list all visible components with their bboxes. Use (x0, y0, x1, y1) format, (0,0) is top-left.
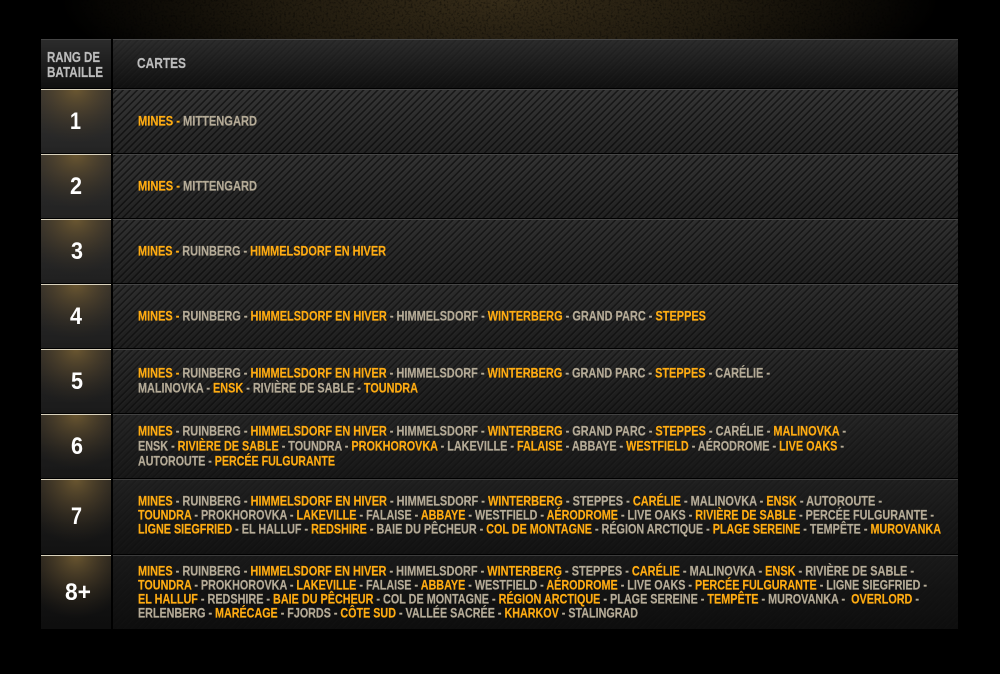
row: rang 5 (41, 349, 958, 413)
maps cell 5: MINES - RUINBERG - HIMMELSDORF EN HIVER - HIMMELSDORF - WINTERBERG - GRAND PARC - STEPPES - CARÉLIE - (138, 365, 770, 382)
header cell: rang de bataille (41, 39, 111, 88)
maps cell 8+: ERLENBERG - MARÉCAGE - FJORDS - CÔTE SUD - VALLÉE SACRÉE - KHARKOV - STALINGRAD (138, 604, 638, 622)
header cell: cartes: CARTES (137, 56, 186, 72)
rank cell 7: 7 (71, 503, 82, 530)
row: rang 3 (41, 219, 958, 283)
row: rang 6 (41, 414, 958, 478)
maps cell 4: MINES - RUINBERG - HIMMELSDORF EN HIVER - HIMMELSDORF - WINTERBERG - GRAND PARC - STEPPES (138, 309, 706, 325)
rank cell 2 (41, 154, 111, 218)
rank cell 7 (41, 479, 111, 554)
maps cell 8+ (113, 555, 958, 629)
rank cell 6 (41, 414, 111, 478)
table header (41, 39, 958, 88)
maps cell 6 (113, 414, 958, 478)
maps cell 7 (113, 479, 958, 554)
maps cell 2 (113, 154, 958, 218)
maps cell 8+: TOUNDRA - PROKHOROVKA - LAKEVILLE - FALAISE - ABBAYE - WESTFIELD - AÉRODROME - LIVE OAKS - PERCÉE FULGURANTE - LIGNE SIEGFRIED - (138, 577, 927, 594)
rank cell 1: 1 (70, 108, 81, 135)
maps cell 7: LIGNE SIEGFRIED - EL HALLUF - REDSHIRE - BAIE DU PÊCHEUR - COL DE MONTAGNE - RÉGION ARCTIQUE - PLAGE SEREINE - TEMPÊTE - MUROVANKA (138, 520, 941, 538)
rank cell 5 (41, 349, 111, 413)
header cell: rang de bataille: BATAILLE (47, 65, 103, 81)
rank cell 5: 5 (71, 368, 83, 395)
maps cell 7: MINES - RUINBERG - HIMMELSDORF EN HIVER - HIMMELSDORF - WINTERBERG - STEPPES - CARÉLIE - MALINOVKA - ENSK - AUTOROUTE - (138, 493, 882, 510)
maps cell 3 (113, 219, 958, 283)
maps cell 6: MINES - RUINBERG - HIMMELSDORF EN HIVER - HIMMELSDORF - WINTERBERG - GRAND PARC - STEPPES - CARÉLIE - MALINOVKA - (138, 423, 846, 440)
maps cell 3: MINES - RUINBERG - HIMMELSDORF EN HIVER (138, 244, 386, 260)
rank cell 2: 2 (70, 173, 82, 200)
rank cell 8+: 8+ (65, 579, 91, 606)
rank cell 3: 3 (71, 238, 83, 265)
row: rang 8+ (41, 555, 958, 629)
row: rang 7 (41, 479, 958, 554)
rank cell 6: 6 (71, 433, 83, 460)
rank cell 1 (41, 89, 111, 153)
rank cell 4 (41, 284, 111, 348)
header cell: rang de bataille: RANG DE (47, 50, 100, 66)
row: rang 2 (41, 154, 958, 218)
rank cell 4: 4 (70, 303, 82, 330)
rank cell 8+ (41, 555, 111, 629)
maps cell 8+: MINES - RUINBERG - HIMMELSDORF EN HIVER - HIMMELSDORF - WINTERBERG - STEPPES - CARÉLIE - MALINOVKA - ENSK - RIVIÈRE DE SABLE - (138, 563, 914, 580)
maps cell 1: MINES - MITTENGARD (138, 114, 257, 130)
row: rang 4 (41, 284, 958, 348)
maps cell 7: TOUNDRA - PROKHOROVKA - LAKEVILLE - FALAISE - ABBAYE - WESTFIELD - AÉRODROME - LIVE OAKS - RIVIÈRE DE SABLE - PERCÉE FULGURANTE - (138, 507, 934, 524)
header cell: cartes (113, 39, 958, 88)
maps cell 2: MINES - MITTENGARD (138, 179, 257, 195)
row: rang 1 (41, 89, 958, 153)
maps cell 8+: EL HALLUF - REDSHIRE - BAIE DU PÊCHEUR - COL DE MONTAGNE - RÉGION ARCTIQUE - PLAGE SEREINE - TEMPÊTE - MUROVANKA - OVERLORD - (138, 590, 919, 608)
maps cell 5: MALINOVKA - ENSK - RIVIÈRE DE SABLE - TOUNDRA (138, 380, 418, 397)
maps cell 6: AUTOROUTE - PERCÉE FULGURANTE (138, 453, 335, 470)
maps cell 4 (113, 284, 958, 348)
rank cell 3 (41, 219, 111, 283)
maps cell 1 (113, 89, 958, 153)
maps cell 5 (113, 349, 958, 413)
maps cell 6: ENSK - RIVIÈRE DE SABLE - TOUNDRA - PROKHOROVKA - LAKEVILLE - FALAISE - ABBAYE - WESTFIELD - AÉRODROME - LIVE OAKS - (138, 438, 844, 455)
